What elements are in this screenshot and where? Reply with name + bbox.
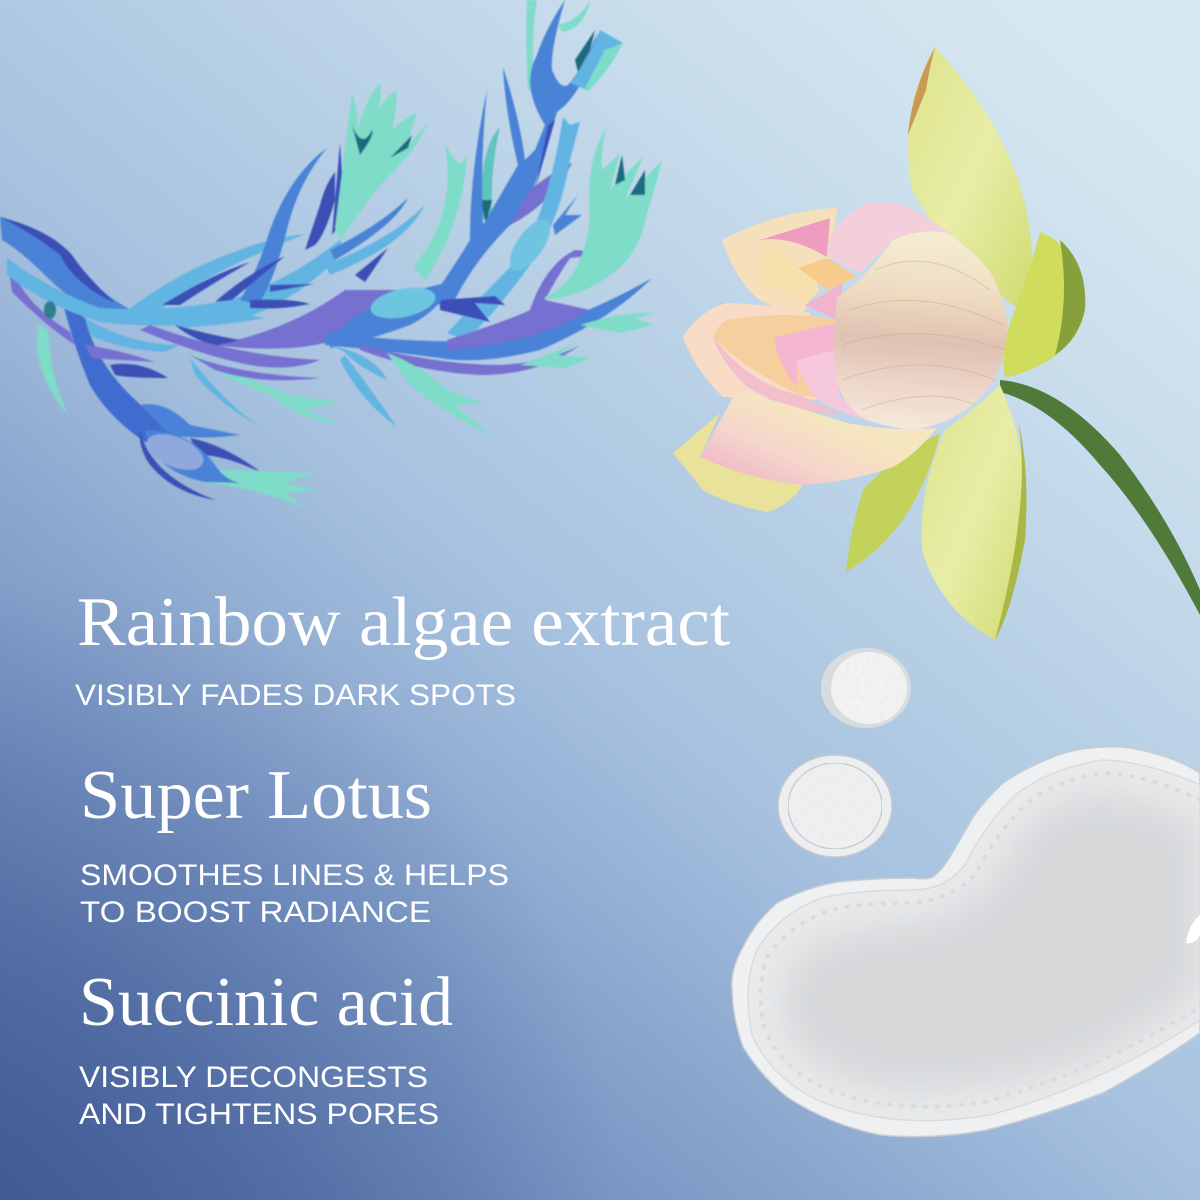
description: VISIBLY DECONGESTS bbox=[79, 1061, 428, 1094]
lotus central bud bbox=[834, 232, 1007, 430]
gel highlight bbox=[1186, 915, 1200, 943]
small drop top bbox=[821, 648, 911, 728]
text: super lotus: TO BOOST RADIANCE bbox=[80, 896, 431, 929]
text: succinic acid bbox=[79, 964, 453, 1131]
description: VISIBLY FADES DARK SPOTS bbox=[75, 679, 516, 712]
description: SMOOTHES LINES & HELPS bbox=[80, 859, 509, 892]
heading: Super Lotus bbox=[80, 757, 432, 834]
text: super lotus bbox=[80, 757, 509, 929]
gel bubbles bbox=[761, 773, 1200, 1107]
illustration: lotus flower bbox=[673, 47, 1200, 640]
algae left cluster bbox=[0, 148, 400, 507]
text: rainbow algae extract bbox=[75, 584, 731, 712]
lotus lower petal bbox=[700, 390, 937, 485]
heading: Rainbow algae extract bbox=[77, 584, 731, 661]
illustration: rainbow algae bbox=[0, 0, 662, 507]
lotus pink outer petals bbox=[683, 202, 950, 423]
heading: Succinic acid bbox=[79, 964, 453, 1041]
algae main right stems bbox=[325, 0, 662, 437]
serum drops bbox=[732, 648, 1200, 1137]
large gel blob bbox=[732, 747, 1200, 1137]
lotus green petals bbox=[673, 47, 1085, 640]
lotus stem bbox=[1000, 380, 1200, 615]
algae teal bud top left bbox=[325, 83, 428, 282]
text: succinic acid: AND TIGHTENS PORES bbox=[79, 1098, 439, 1131]
small drop bottom bbox=[778, 755, 892, 857]
lotus bud veins bbox=[842, 261, 1005, 410]
